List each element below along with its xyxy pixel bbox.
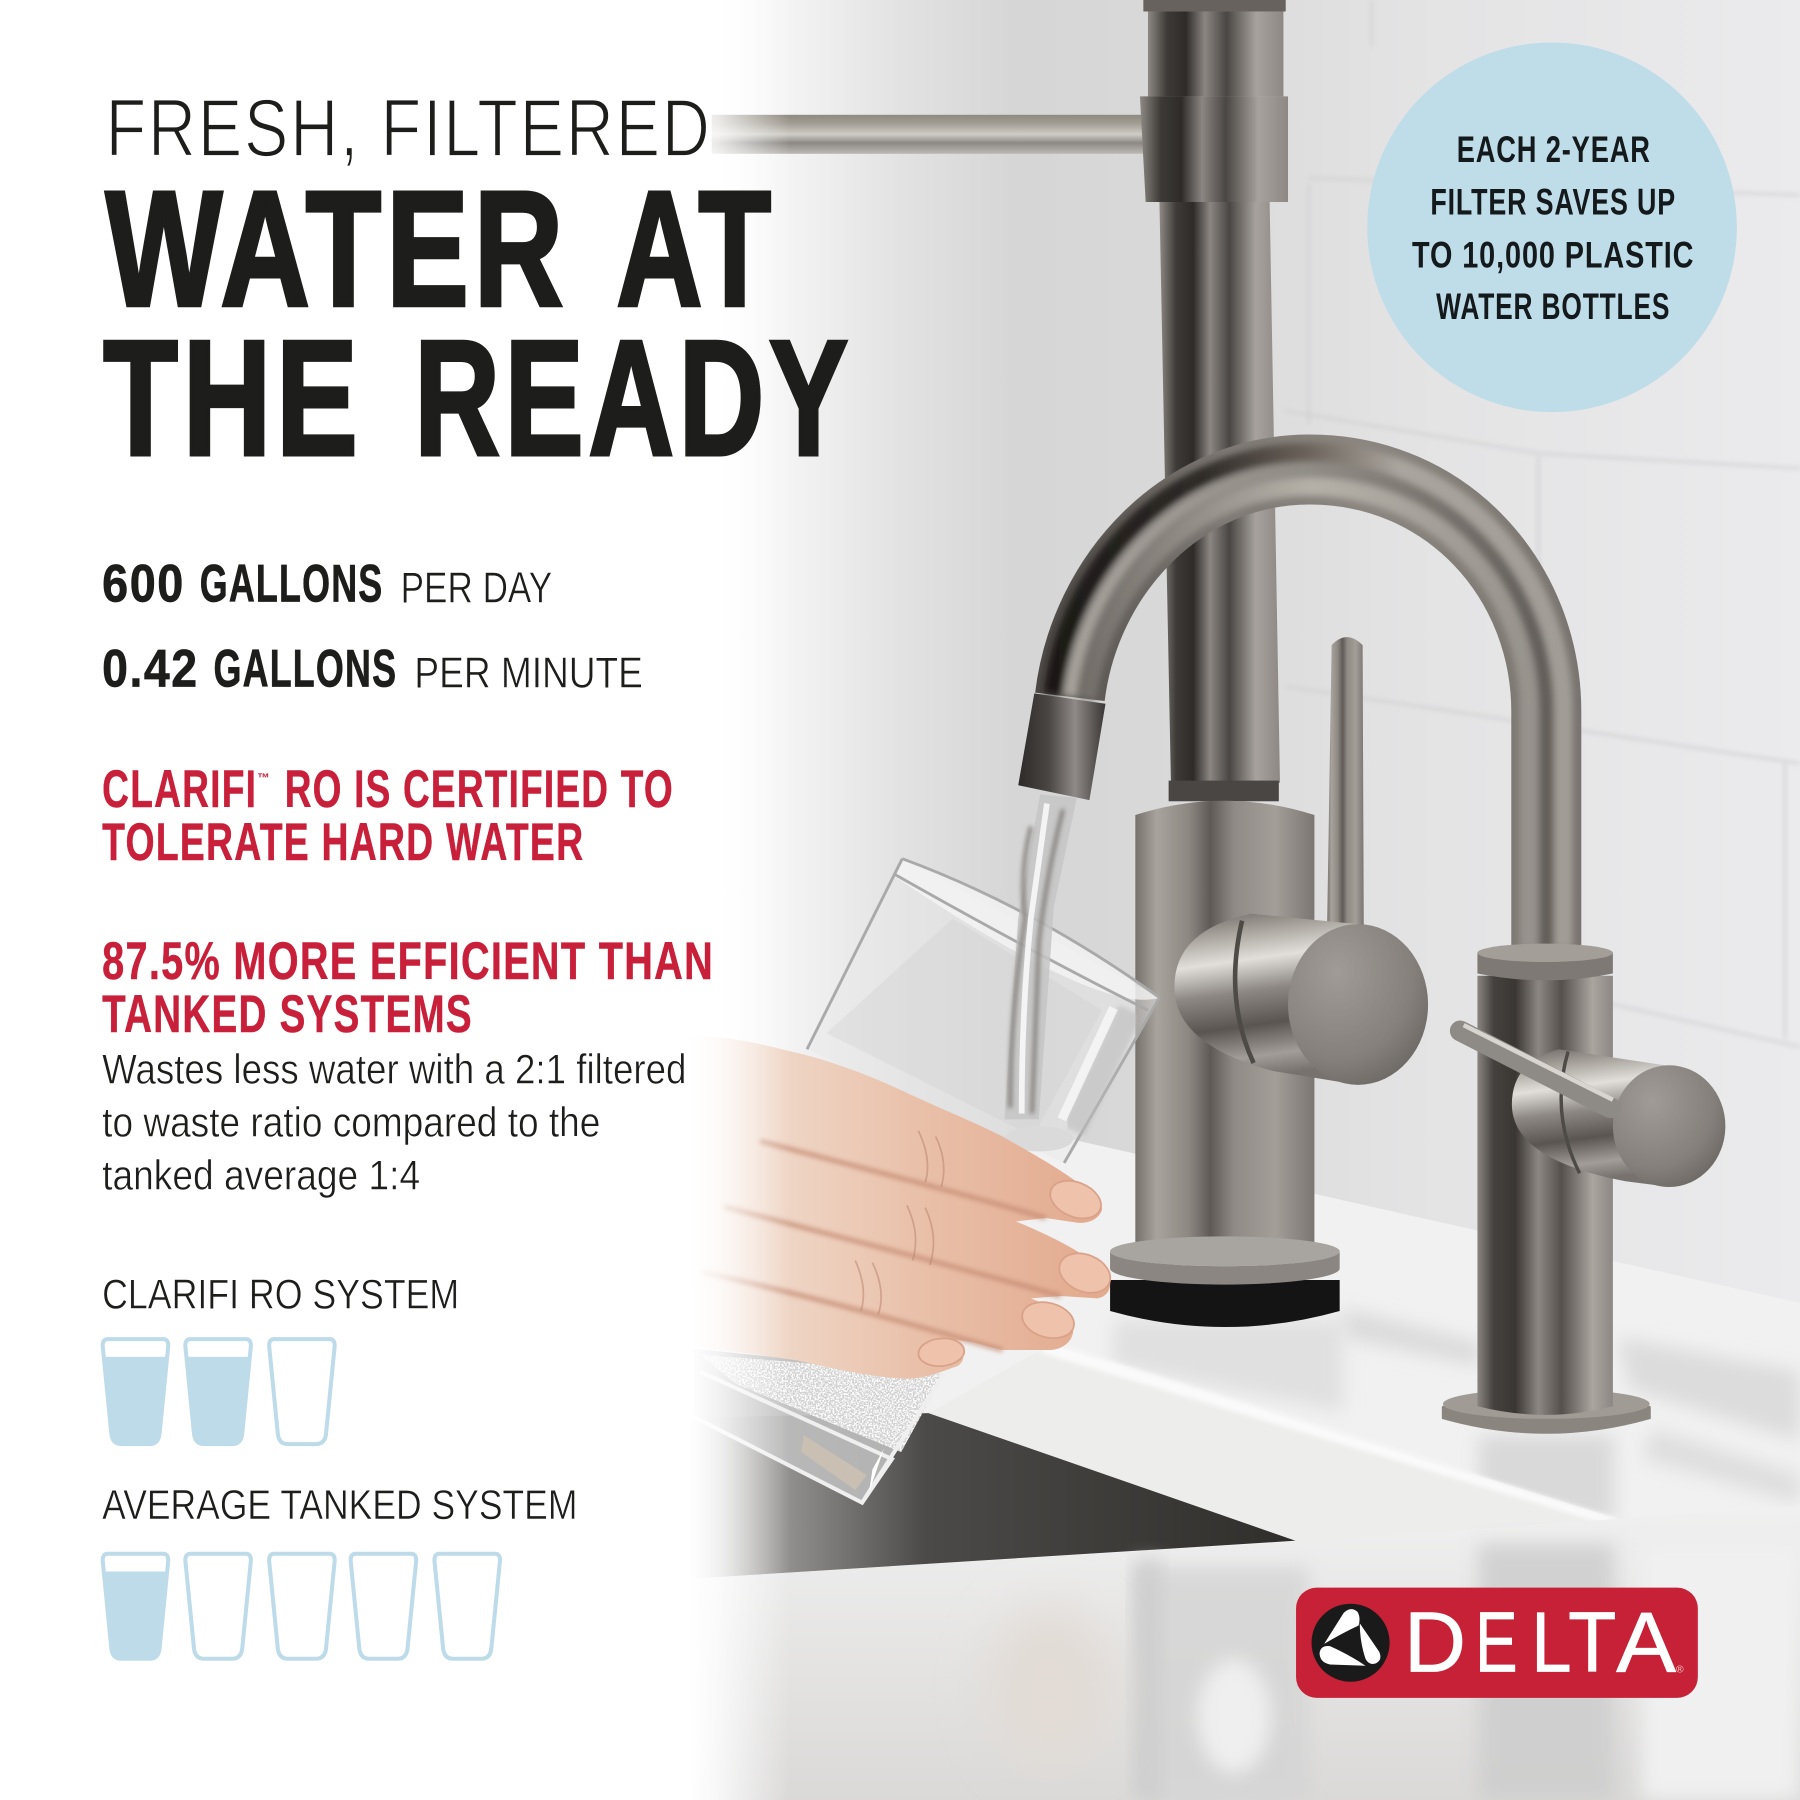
efficiency heading: 87.5% MORE EFFICIENT THAN [102,932,714,991]
flow rate stats: GALLONS [200,555,383,614]
flow rate stats: GALLONS [214,639,397,698]
flow rate stats: PER DAY [401,565,552,613]
callout: filter savings: FILTER SAVES UP [1430,182,1676,223]
logo: Delta: E [1475,1594,1518,1689]
flow rate stats: PER MINUTE [414,650,643,698]
front counter with reflections [677,1506,1800,1800]
efficiency heading [102,932,714,1044]
efficiency description: Wastes less water with a 2:1 filtered [102,1047,686,1093]
collar [1477,944,1613,980]
label: CLARIFI RO SYSTEM [102,1272,459,1318]
icon: full glass [185,1339,251,1444]
comparison: average tanked system [102,1482,577,1659]
main faucet [1018,452,1725,1434]
flow rate stats [102,555,643,698]
efficiency description: to waste ratio compared to the [102,1099,600,1145]
efficiency description [102,1047,686,1198]
logo: Delta: L [1531,1594,1572,1689]
hard water certification: RO IS CERTIFIED TO [285,760,674,819]
callout: filter savings: WATER BOTTLES [1436,286,1670,327]
photo: kitchen faucet scene [672,0,1800,1800]
lever [1327,637,1364,932]
water stream [1004,794,1077,1119]
logo: Delta: T [1568,1594,1616,1689]
hard water certification [102,760,674,872]
title: bold line one: AT [616,156,776,340]
callout: filter savings [1367,42,1737,412]
icon: full glass [103,1339,168,1444]
handle [1512,1049,1670,1187]
sink edge and basin [677,1343,1617,1580]
icon: empty glass [434,1554,500,1659]
hard water certification: ™ [257,771,270,785]
title: light line: FRESH, FILTERED [106,83,712,174]
icon: empty glass [351,1554,416,1659]
drinking glass [689,859,1159,1503]
glass bottom with bubbles [693,1349,944,1503]
callout: filter savings: TO 10,000 PLASTIC [1412,234,1694,275]
title: bold line one: THE [103,306,363,490]
logo: Delta: A [1616,1594,1676,1689]
title: bold line one: READY [414,306,853,490]
horizontal side bar [712,115,1162,154]
icon: full glass [103,1554,168,1659]
nozzle [1018,693,1105,800]
callout: filter savings: EACH 2-YEAR [1457,129,1651,170]
hard water certification: CLARIFI [102,760,257,819]
base plate [1110,1280,1340,1327]
title [103,83,853,490]
icon: empty glass [269,1339,335,1444]
logo: Delta [1296,1588,1698,1698]
comparison: Clarifi RO system [102,1272,459,1444]
fade into white panel [672,0,804,1800]
flow rate stats: 0.42 [102,639,199,698]
logo: Delta: ® [1676,1665,1684,1676]
collar ring [1169,781,1279,801]
lever [1460,1031,1611,1108]
flow rate stats: 600 [102,555,185,614]
logo: Delta: D [1404,1594,1466,1689]
gooseneck tube [1053,452,1564,948]
hard water certification: TOLERATE HARD WATER [102,813,584,872]
icon: empty glass [185,1554,251,1659]
base plate [1442,1395,1651,1434]
label: AVERAGE TANKED SYSTEM [102,1482,577,1528]
efficiency heading: TANKED SYSTEMS [102,985,473,1044]
efficiency description: tanked average 1:4 [102,1152,420,1198]
background faucet [712,0,1428,1327]
icon: Delta triangle mark [1312,1604,1390,1682]
title: bold line one [103,156,853,490]
hand [689,1035,1116,1379]
body [1477,976,1613,1415]
counter top [677,1131,1800,1800]
upper column [1143,0,1286,11]
handle [1174,914,1358,1085]
title: bold line one: WATER [106,156,568,340]
icon: empty glass [269,1554,335,1659]
tiled wall [677,0,1800,1607]
